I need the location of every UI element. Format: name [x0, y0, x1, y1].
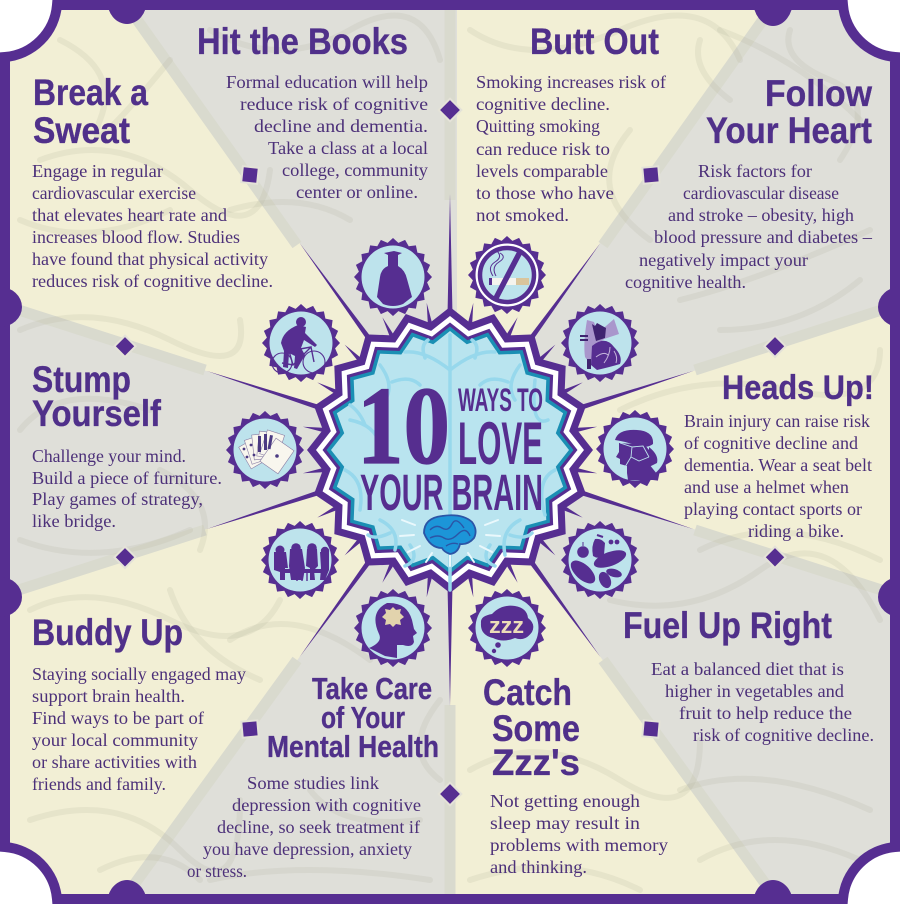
panel: Buddy Up: [32, 612, 246, 794]
heading: Take Care: [312, 671, 432, 706]
body text: decline, so seek treatment if: [217, 817, 420, 837]
heading: Break a: [33, 72, 148, 113]
body text: Some studies link: [247, 773, 379, 793]
icon: heart: [561, 304, 639, 382]
icon: sleep cloud: zzz: [489, 613, 524, 638]
panel: Take Care of Your Mental Health: [187, 671, 439, 881]
body text: Risk factors for: [698, 161, 812, 181]
marker: diamond top: [439, 99, 461, 121]
heading: Zzz's: [492, 742, 580, 783]
body text: Eat a balanced diet that is: [651, 659, 844, 679]
heading: Sweat: [33, 110, 130, 151]
icon: friends at table: [261, 521, 339, 599]
panel: Catch Some Zzz's: [483, 672, 668, 877]
heading: Butt Out: [530, 21, 659, 62]
body text: you have depression, anxiety: [203, 839, 412, 859]
icon: fruit and vegetables: [561, 521, 639, 599]
panel: Heads Up!: [684, 369, 874, 541]
body text: center or online.: [296, 182, 418, 202]
body text: [476, 72, 666, 225]
icon: cyclist: [262, 304, 340, 382]
body text: problems with memory: [490, 835, 668, 855]
body text: riding a bike.: [748, 521, 844, 541]
body text: cardiovascular disease: [683, 183, 839, 203]
body text: Staying socially engaged may: [32, 664, 246, 684]
heading: Hit the Books: [197, 21, 408, 62]
body text: depression with cognitive: [232, 795, 421, 815]
body text: reduce risk of cognitive: [240, 94, 428, 114]
marker: square lower right: [642, 720, 660, 738]
body text: like bridge.: [32, 511, 116, 531]
body text: [32, 161, 273, 291]
marker: diamond bottom: [439, 783, 461, 805]
heading: Catch: [483, 672, 572, 713]
marker: diamond right upper: [764, 336, 786, 357]
body text: Take a class at a local: [268, 138, 428, 158]
heading: Yourself: [32, 393, 162, 434]
marker: square upper right: [642, 166, 660, 184]
body text: have found that physical activity: [32, 249, 268, 269]
icon: head with flower: [354, 589, 432, 667]
body text: Not getting enough: [490, 791, 640, 811]
body text: Engage in regular: [32, 161, 163, 181]
panel: Stump Yourself: [32, 359, 222, 531]
body text: Brain injury can raise risk: [684, 411, 870, 431]
body text: [187, 773, 421, 881]
body text: to those who have: [476, 183, 614, 203]
body text: and stroke – obesity, high: [668, 205, 854, 225]
body text: levels comparable: [476, 161, 608, 181]
panel: Follow Your Heart: [625, 73, 873, 292]
body text: or share activities with: [32, 752, 197, 772]
body text: fruit to help reduce the: [679, 703, 852, 723]
body text: negatively impact your: [639, 250, 808, 270]
title: 10 Ways to Love Your Brain: 10: [357, 365, 450, 488]
body text: can reduce risk to: [476, 139, 610, 159]
body text: that elevates heart rate and: [32, 205, 227, 225]
body text: cardiovascular exercise: [32, 183, 196, 203]
body text: risk of cognitive decline.: [693, 725, 874, 745]
title: 10 Ways to Love Your Brain: [357, 365, 543, 521]
body text: [651, 659, 874, 745]
body text: [32, 446, 222, 531]
body text: Play games of strategy,: [32, 489, 203, 509]
heading: Stump: [32, 359, 131, 400]
body text: Quitting smoking: [476, 116, 600, 136]
body text: friends and family.: [32, 774, 166, 794]
heading: [267, 671, 439, 764]
heading: Buddy Up: [32, 612, 183, 653]
body text: playing contact sports or: [684, 499, 862, 519]
body text: your local community: [32, 730, 198, 750]
body text: college, community: [282, 160, 428, 180]
icon: no smoking: [468, 236, 546, 314]
heading: Follow: [765, 73, 872, 114]
heading: [33, 72, 148, 151]
title: 10 Ways to Love Your Brain: YOUR BRAIN: [360, 464, 543, 521]
marker: diamond right lower: [764, 547, 786, 568]
marker: diamond left upper: [114, 336, 136, 357]
body text: and use a helmet when: [684, 477, 849, 497]
body text: of cognitive decline and: [684, 433, 858, 453]
title: 10 Ways to Love Your Brain: WAYS TO: [458, 382, 543, 418]
panel: Fuel Up Right: [623, 605, 874, 745]
panel: Break a Sweat: [32, 72, 273, 291]
body text: support brain health.: [32, 686, 185, 706]
body text: Build a piece of furniture.: [32, 468, 222, 488]
body text: Find ways to be part of: [32, 708, 204, 728]
heading: of Your: [321, 700, 405, 735]
body text: increases blood flow. Studies: [32, 227, 240, 247]
heading: [706, 73, 872, 151]
panel: Hit the Books: [197, 21, 428, 202]
body text: [490, 791, 668, 877]
marker: diamond left lower: [114, 547, 136, 568]
central badge: [307, 307, 593, 593]
heading: [483, 672, 580, 783]
icon: graduate: [354, 238, 432, 316]
body text: or stress.: [187, 861, 247, 881]
heading: Your Heart: [706, 110, 872, 151]
marker: square lower left: [241, 720, 259, 738]
heading: Heads Up!: [722, 369, 874, 407]
body text: [32, 664, 246, 794]
body text: [625, 161, 873, 292]
body text: Formal education will help: [226, 72, 428, 92]
body text: cognitive decline.: [476, 94, 610, 114]
body text: sleep may result in: [490, 813, 640, 833]
icon: small blue brain: [400, 515, 500, 566]
body text: Challenge your mind.: [32, 446, 186, 466]
body text: not smoked.: [476, 205, 569, 225]
icon: sleep cloud: [468, 589, 546, 667]
body text: and thinking.: [490, 857, 587, 877]
body text: cognitive health.: [625, 272, 746, 292]
icon: playing cards: [226, 411, 304, 489]
marker: square upper left: [241, 166, 259, 184]
panel: Butt Out: [476, 21, 666, 225]
heading: [32, 359, 162, 434]
body text: dementia. Wear a seat belt: [684, 455, 872, 475]
body text: [684, 411, 872, 541]
heading: Mental Health: [267, 729, 439, 764]
heading: Fuel Up Right: [623, 605, 832, 646]
body text: blood pressure and diabetes –: [654, 227, 873, 247]
body text: [226, 72, 428, 202]
body text: reduces risk of cognitive decline.: [32, 271, 273, 291]
sunburst rays: [206, 194, 694, 706]
icon: helmet: [596, 410, 674, 488]
body text: Smoking increases risk of: [476, 72, 666, 92]
heading: Some: [492, 708, 580, 749]
body text: decline and dementia.: [254, 116, 428, 136]
body text: higher in vegetables and: [665, 681, 844, 701]
title: 10 Ways to Love Your Brain: LOVE: [458, 410, 543, 477]
